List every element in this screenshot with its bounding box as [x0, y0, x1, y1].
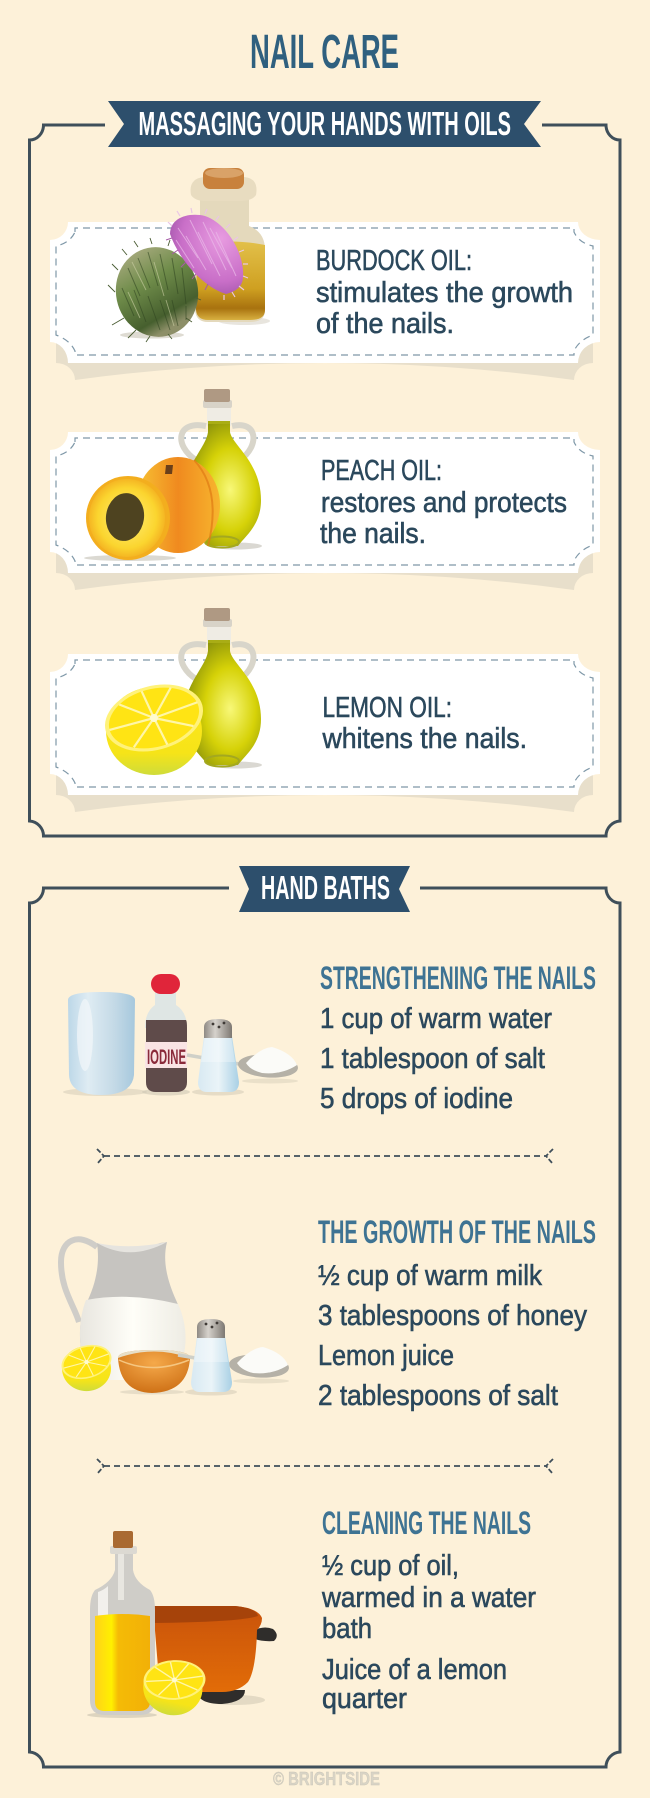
divider	[97, 1459, 553, 1474]
text: burdock oil: BURDOCK OIL:	[316, 245, 472, 277]
ribbon heading: hand baths	[239, 866, 410, 912]
icon: green burdock bud	[108, 238, 206, 345]
icon: peach	[84, 457, 220, 561]
text: recipe three: warmed in a water	[321, 1582, 536, 1614]
card: burdock oil	[50, 168, 600, 380]
panel frame	[30, 888, 620, 1767]
peach pit	[103, 491, 147, 543]
recipe: the growth of the nails	[58, 1214, 596, 1412]
icon: honey bowl	[118, 1350, 190, 1394]
text: recipe two: 3 tablespoons of honey	[318, 1300, 587, 1332]
text: peach oil: restores and protects	[321, 487, 567, 519]
text: burdock oil	[316, 245, 573, 340]
icon: iodine bottle	[142, 974, 190, 1096]
text: recipe three: ½ cup of oil,	[322, 1550, 459, 1582]
icon: orange pot	[153, 1606, 277, 1705]
text: peach oil	[320, 455, 567, 550]
icon: oil jug	[181, 389, 262, 550]
icon: lemon half	[58, 1340, 115, 1391]
icon: milk pitcher	[61, 1239, 186, 1380]
text: burdock oil: stimulates the growth	[316, 277, 573, 309]
text: recipe three: quarter	[322, 1683, 407, 1715]
watermark: © BRIGHTSIDE	[273, 1769, 380, 1789]
icon: oil bottle	[191, 168, 270, 325]
ribbon heading: hand baths: HAND BATHS	[261, 869, 390, 906]
card: lemon oil	[50, 608, 600, 812]
panel: hand baths	[30, 866, 620, 1767]
text: lemon oil: whitens the nails.	[322, 723, 527, 755]
panel: massaging your hands with oils	[30, 101, 620, 836]
icon: lemon half	[97, 674, 211, 775]
divider	[97, 1149, 553, 1164]
recipe: cleaning the nails	[87, 1505, 536, 1722]
text: recipe one: 5 drops of iodine	[320, 1083, 513, 1115]
recipe: strengthening the nails	[63, 960, 596, 1115]
icon: salt shaker	[185, 1319, 237, 1396]
text: burdock oil: of the nails.	[316, 308, 454, 340]
icon: oil jug	[181, 608, 262, 768]
text: recipe one: 1 cup of warm water	[320, 1003, 552, 1035]
text: peach oil: the nails.	[320, 518, 426, 550]
text: recipe one	[320, 960, 596, 1115]
icon: oil bottle	[87, 1531, 157, 1718]
text: recipe one: 1 tablespoon of salt	[320, 1043, 545, 1075]
text: recipe three: bath	[322, 1613, 372, 1645]
panel frame	[30, 125, 620, 836]
text: recipe three	[321, 1505, 536, 1715]
text: lemon oil: LEMON OIL:	[322, 692, 452, 724]
icon: water glass	[63, 992, 147, 1096]
text: recipe two	[318, 1214, 596, 1412]
title: NAIL CARE	[250, 26, 399, 79]
text: lemon oil	[322, 692, 527, 755]
card: peach oil	[50, 389, 600, 590]
text: recipe two: Lemon juice	[318, 1340, 454, 1372]
text: peach oil: PEACH OIL:	[321, 455, 442, 487]
icon: spoon of salt	[187, 1047, 299, 1084]
text: recipe two: 2 tablespoons of salt	[318, 1380, 558, 1412]
icon: pink burdock flower	[166, 208, 248, 300]
text: recipe three: Juice of a lemon	[322, 1654, 507, 1686]
text: recipe two: ½ cup of warm milk	[318, 1260, 542, 1292]
icon: lemon half	[133, 1646, 214, 1722]
icon: spoon of salt	[178, 1347, 290, 1384]
icon: iodine bottle: IODINE	[147, 1046, 186, 1069]
ribbon heading: oils	[108, 101, 541, 147]
icon: salt shaker	[192, 1019, 244, 1096]
